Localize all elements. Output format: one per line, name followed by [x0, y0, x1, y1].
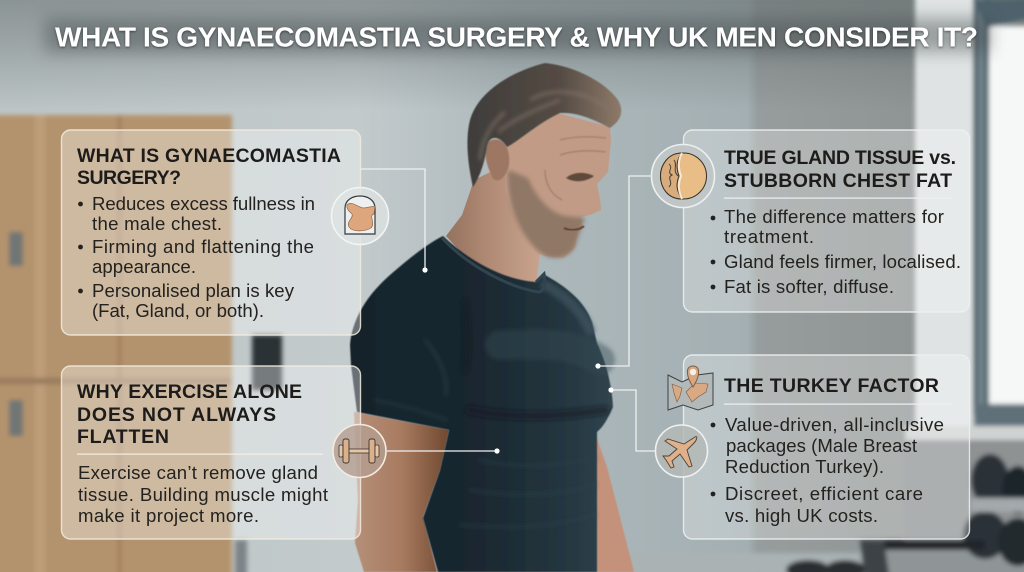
- near arm: [354, 412, 449, 572]
- panel: true gland tissue vs stubborn chest fat: The difference matters for: [724, 206, 944, 227]
- panel: why exercise alone does not always flatten: [62, 366, 360, 539]
- panel: the turkey factor: Reduction Turkey).: [725, 456, 884, 477]
- mouth: [564, 226, 584, 230]
- panel: what is gynaecomastia surgery: Reduces excess fullness in: [92, 193, 315, 214]
- panel: why exercise alone does not always flatten: make it project more.: [78, 505, 259, 526]
- icon: dumbbell: [333, 424, 386, 478]
- hair highlight: [480, 92, 612, 160]
- icon: airplane: [656, 425, 708, 477]
- panel: true gland tissue vs stubborn chest fat: Fat is softer, diffuse.: [724, 276, 894, 297]
- panel: the turkey factor: packages (Male Breast: [726, 435, 918, 456]
- panel: what is gynaecomastia surgery: WHAT IS GYNAECOMASTIA: [77, 145, 341, 167]
- panel: the turkey factor: vs. high UK costs.: [725, 505, 878, 526]
- panel: true gland tissue vs stubborn chest fat: STUBBORN CHEST FAT: [724, 170, 952, 192]
- panel: true gland tissue vs stubborn chest fat: Gland feels firmer, localised.: [724, 251, 961, 272]
- face shading: [545, 137, 606, 200]
- panel: why exercise alone does not always flatten: WHY EXERCISE ALONE: [77, 381, 302, 403]
- panel: why exercise alone does not always flatten: tissue. Building muscle might: [78, 484, 329, 505]
- panel: what is gynaecomastia surgery: SURGERY?: [77, 167, 181, 189]
- collar: [442, 238, 545, 292]
- panel: what is gynaecomastia surgery: the male chest.: [92, 213, 222, 234]
- hair: [467, 63, 621, 187]
- panel: what is gynaecomastia surgery: appearance.: [92, 256, 196, 277]
- ear: [486, 139, 509, 180]
- panel: what is gynaecomastia surgery: Firming and flattening the: [92, 236, 314, 257]
- panel: the turkey factor: Value-driven, all-inclusive: [725, 414, 944, 435]
- panel: why exercise alone does not always flatten: Exercise can’t remove gland: [78, 462, 318, 483]
- title: WHAT IS GYNAECOMASTIA SURGERY & WHY UK MEN CONSIDER IT?: [55, 22, 978, 52]
- shirt folds: [375, 285, 605, 527]
- panel: true gland tissue vs stubborn chest fat: [684, 130, 970, 312]
- panel: what is gynaecomastia surgery: [62, 130, 360, 335]
- photo: man in profile: [350, 63, 634, 572]
- eye: [566, 173, 594, 181]
- panel: the turkey factor: THE TURKEY FACTOR: [724, 375, 939, 397]
- head and face: [505, 113, 611, 258]
- icon: gland versus fat: [652, 144, 714, 208]
- icon: world map with pin: [668, 366, 713, 410]
- panel: why exercise alone does not always flatten: DOES NOT ALWAYS: [77, 404, 276, 426]
- panel: why exercise alone does not always flatten: FLATTEN: [77, 426, 169, 448]
- panel: the turkey factor: Discreet, efficient care: [725, 483, 923, 504]
- panel: what is gynaecomastia surgery: (Fat, Gland, or both).: [92, 300, 264, 321]
- panel: true gland tissue vs stubborn chest fat: treatment.: [724, 226, 814, 247]
- connector lines: [361, 169, 656, 454]
- panel: what is gynaecomastia surgery: Personalised plan is key: [92, 280, 295, 301]
- panel: the turkey factor: [684, 355, 970, 539]
- panel: true gland tissue vs stubborn chest fat: TRUE GLAND TISSUE vs.: [724, 147, 956, 169]
- neck: [446, 160, 540, 292]
- beard stubble: [508, 170, 585, 258]
- icon: chest: [332, 188, 388, 244]
- t-shirt: [350, 236, 613, 572]
- far arm: [594, 430, 634, 572]
